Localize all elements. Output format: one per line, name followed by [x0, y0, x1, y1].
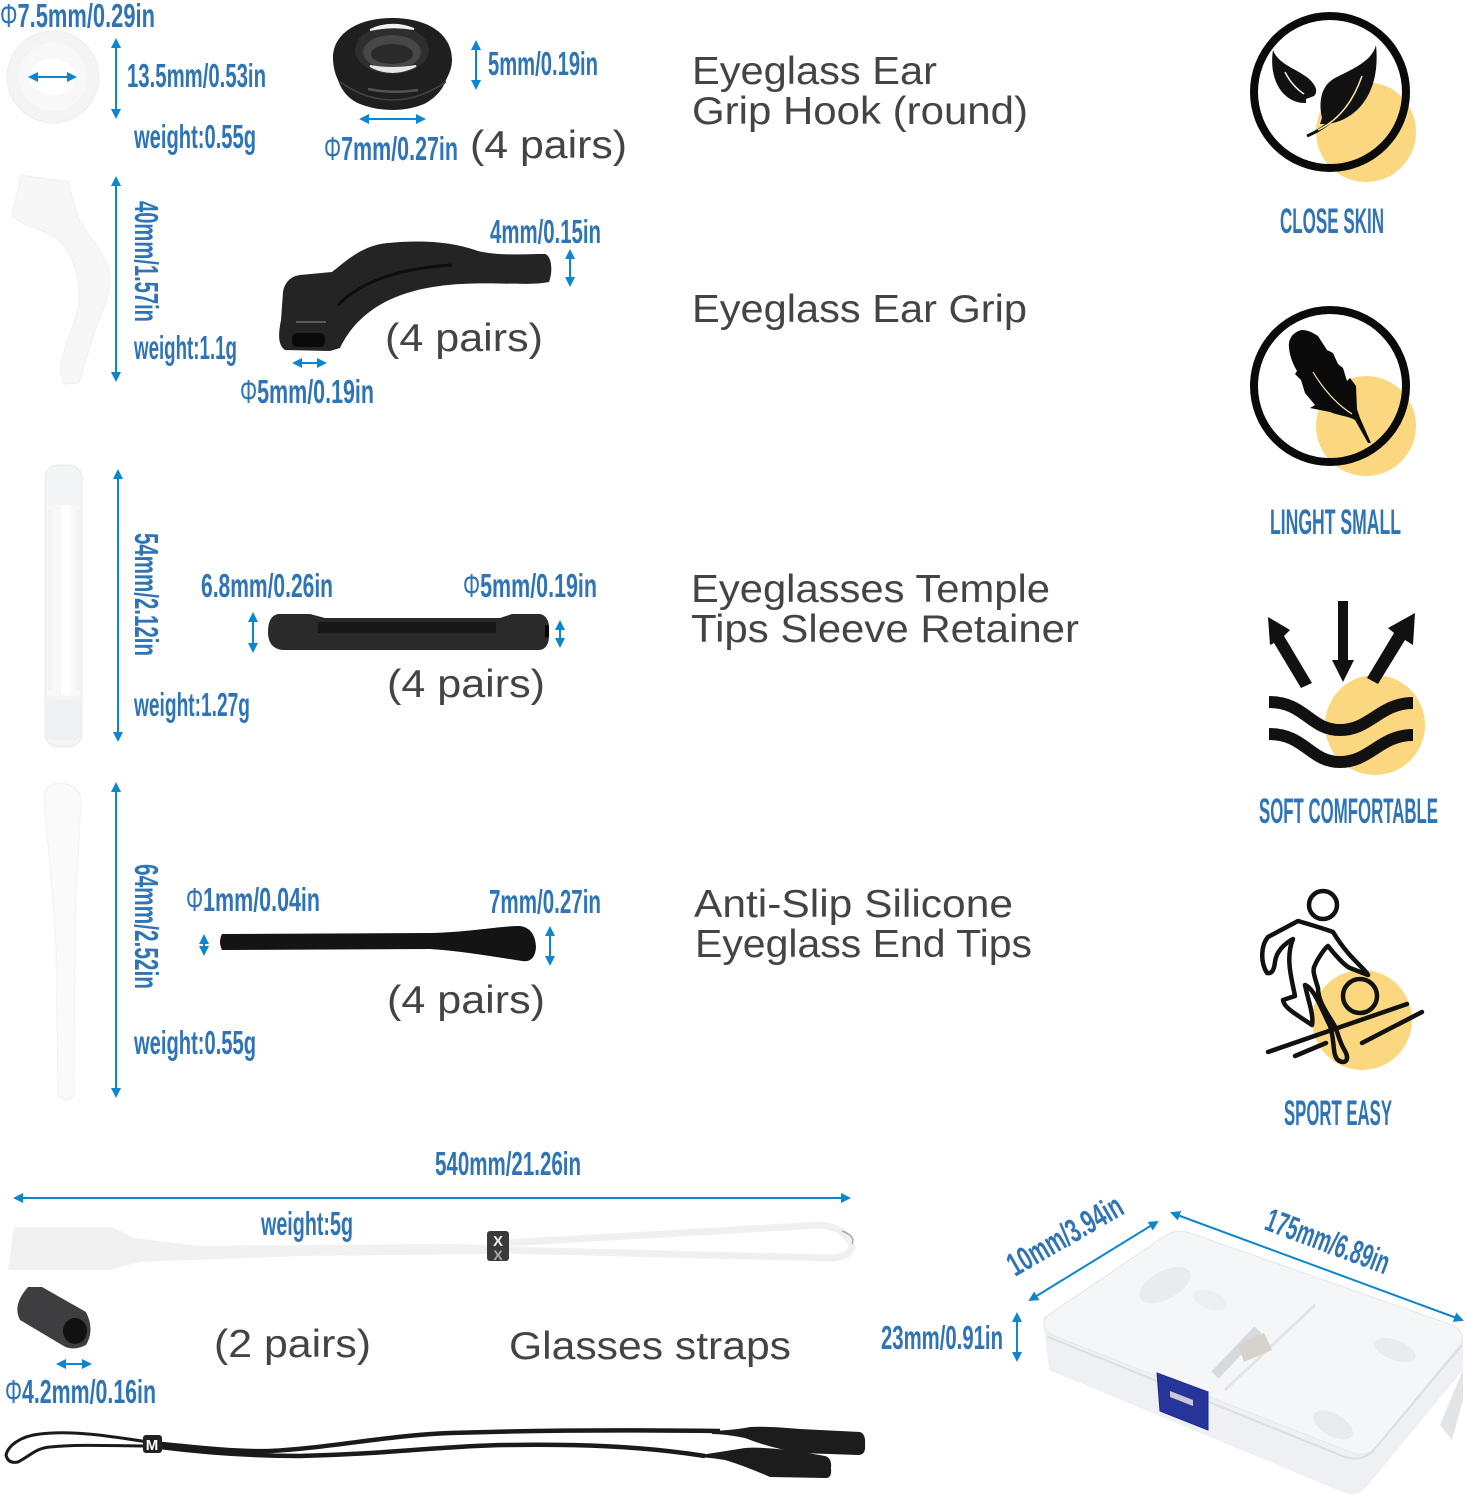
- heading: temple tips: Tips Sleeve Retainer: [691, 608, 1079, 651]
- white end tip: [44, 783, 81, 1100]
- panel: end tips: [44, 783, 1032, 1100]
- heading: temple tips: [691, 568, 1079, 651]
- label: length: 40mm/1.57in: [128, 201, 165, 322]
- plastic box: [1043, 1231, 1463, 1494]
- black end tip: [220, 926, 536, 961]
- label: length: 54mm/2.12in: [128, 533, 165, 656]
- white ear grip: [12, 175, 110, 384]
- label: diameter: Φ7mm/0.27in: [324, 130, 458, 167]
- white silicone ring: [7, 31, 99, 123]
- arrow: ear grip length: [115, 178, 117, 380]
- icon: close skin leaves: [1254, 16, 1416, 182]
- arrow: tube diameter: [294, 362, 325, 364]
- label: small end: Φ1mm/0.04in: [186, 881, 320, 918]
- label: height: 6.8mm/0.26in: [201, 567, 333, 604]
- arrow: tube diameter: [559, 622, 561, 646]
- panel: storage box: [881, 1187, 1463, 1494]
- heading: end tips: Eyeglass End Tips: [695, 923, 1032, 966]
- heading: straps: Glasses straps: [509, 1325, 791, 1368]
- label: height: 5mm/0.19in: [488, 45, 598, 82]
- arrow: box width: [1030, 1222, 1157, 1300]
- heading: round hook: Grip Hook (round): [692, 90, 1028, 133]
- black strap: [6, 1427, 865, 1478]
- strap bead with X: X: [493, 1247, 503, 1263]
- label: weight: weight:0.55g: [133, 1024, 256, 1061]
- heading: round hook: Eyeglass Ear: [692, 50, 937, 93]
- label: tube diameter: Φ5mm/0.19in: [463, 567, 597, 604]
- arrow: tube diameter: [58, 1363, 90, 1365]
- panel: temple tips sleeve retainer: [45, 465, 1079, 747]
- blue clip: [1157, 1373, 1208, 1430]
- black strap: M: [146, 1437, 158, 1454]
- label: strap length: 540mm/21.26in: [435, 1145, 581, 1182]
- arrow: ring height: [115, 40, 117, 117]
- label: big end: 7mm/0.27in: [489, 883, 601, 920]
- arrow: end height: [569, 251, 571, 285]
- black tube end: [17, 1287, 90, 1348]
- arrow: inner diameter: [30, 76, 75, 78]
- arrow: strap length: [15, 1197, 849, 1199]
- arrow: sleeve length: [117, 471, 119, 740]
- arrow: small end: [203, 936, 205, 954]
- label: tube diameter: Φ5mm/0.19in: [240, 373, 374, 410]
- label: quantity: (4 pairs): [387, 979, 545, 1022]
- icon: sport easy figure: [1262, 891, 1422, 1070]
- label: weight: weight:1.1g: [133, 329, 237, 366]
- label: quantity: (4 pairs): [387, 663, 545, 706]
- label: tube diameter: Φ4.2mm/0.16in: [5, 1373, 156, 1410]
- arrow: box height: [1016, 1314, 1018, 1360]
- white sleeve: [45, 465, 82, 747]
- label: weight: weight:1.27g: [133, 686, 250, 723]
- strap bead with X: X: [493, 1233, 503, 1250]
- label: strap weight: weight:5g: [260, 1205, 353, 1242]
- arrow: big end: [549, 928, 551, 964]
- black sleeve: [268, 614, 549, 650]
- panel: glasses straps: [5, 1145, 865, 1478]
- label: end height: 4mm/0.15in: [490, 213, 601, 250]
- panel: round ear grip hook: [0, 0, 1028, 167]
- label: length: 64mm/2.52in: [128, 864, 165, 989]
- heading: temple tips: Eyeglasses Temple: [691, 568, 1050, 611]
- arrow: box length: [1172, 1213, 1462, 1320]
- label: quantity: (4 pairs): [470, 124, 627, 167]
- panel: ear grip: [12, 175, 1027, 410]
- heading: ear grip: Eyeglass Ear Grip: [692, 288, 1027, 331]
- label: quantity: (2 pairs): [214, 1323, 371, 1366]
- heading: end tips: [694, 883, 1032, 966]
- arrow: tip length: [115, 784, 117, 1096]
- strap bead with X: [487, 1231, 509, 1263]
- arrow: black ring height: [475, 42, 477, 88]
- label: box width: 10mm/3.94in: [1000, 1187, 1129, 1283]
- label: outer size: 13.5mm/0.53in: [127, 57, 266, 94]
- black silicone ring: [333, 18, 452, 110]
- arrow: black ring diameter: [361, 118, 424, 120]
- black ear grip: [279, 242, 551, 351]
- icon column: features: [1254, 16, 1438, 1133]
- heading: end tips: Anti-Slip Silicone: [694, 883, 1013, 926]
- arrow: sleeve height: [252, 614, 254, 651]
- white strap: [8, 1225, 853, 1270]
- heading: round hook: [692, 50, 1028, 133]
- icon: soft comfortable waves and arrows: [1268, 601, 1425, 775]
- label: box height: 23mm/0.91in: [881, 1319, 1003, 1356]
- icon: light feather: [1254, 310, 1416, 476]
- label: quantity: (4 pairs): [385, 317, 543, 360]
- label: weight: weight:0.55g: [133, 118, 256, 155]
